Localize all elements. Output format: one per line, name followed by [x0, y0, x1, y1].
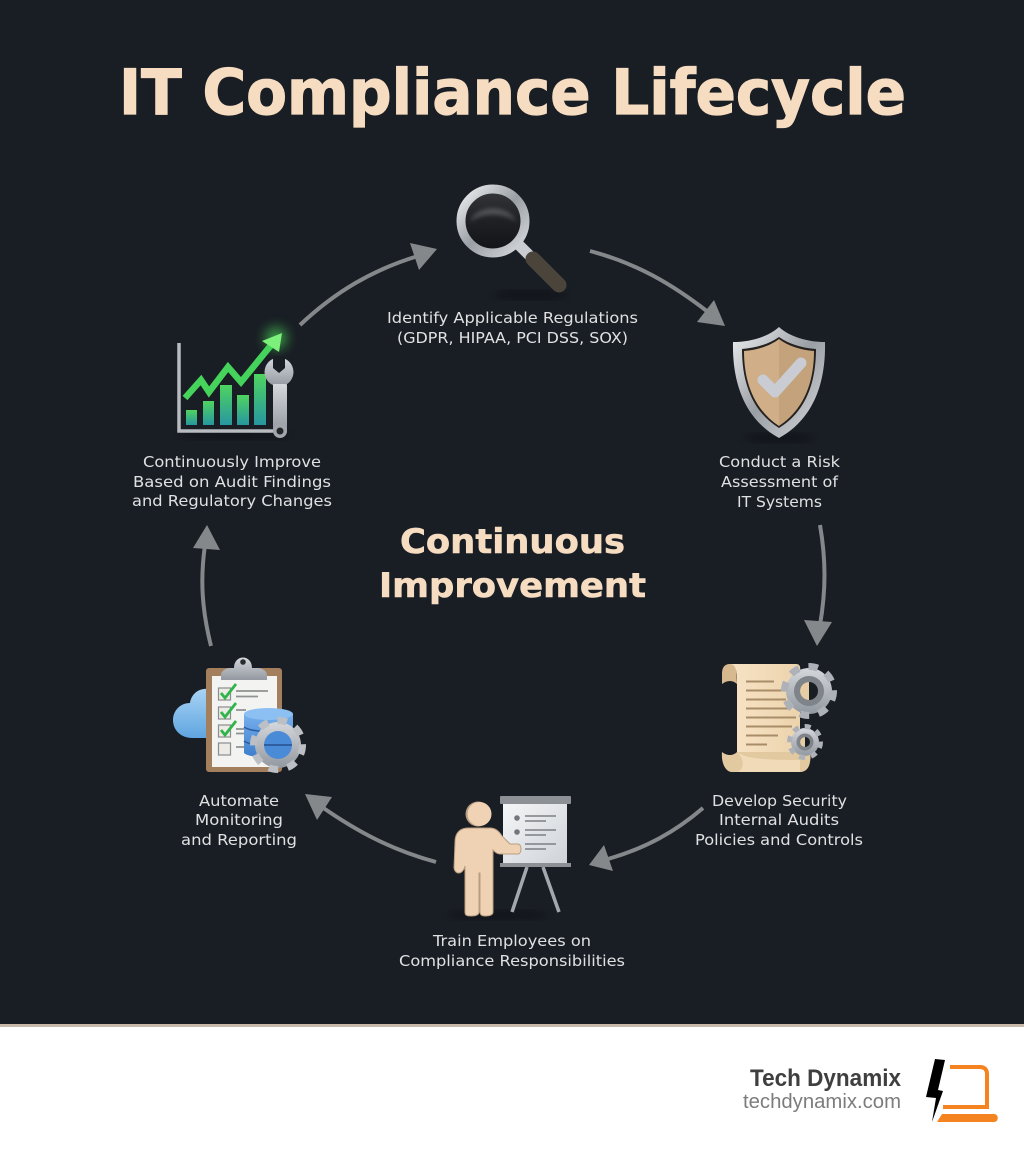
- label: risk assessment: [719, 453, 840, 511]
- arrow: risk assessment to policies: [804, 525, 832, 646]
- label: continuously improve: Based on Audit Findings: [133, 473, 331, 491]
- label: train employees: [399, 932, 625, 970]
- arrow: training to automate: [305, 794, 436, 862]
- brand name: Tech Dynamix: [750, 1065, 902, 1092]
- icon: growth chart with wrench: [179, 327, 294, 438]
- icon: presenter at whiteboard: [448, 796, 571, 918]
- label: risk assessment: IT Systems: [737, 493, 822, 511]
- label: identify regulations: (GDPR, HIPAA, PCI DSS, SOX): [397, 329, 628, 347]
- label: identify regulations: Identify Applicable Regulations: [387, 309, 638, 327]
- center heading: continuous improvement: [379, 522, 646, 606]
- label: automate monitoring: Automate: [199, 792, 279, 810]
- label: security policies: [695, 792, 863, 849]
- label: identify regulations: [387, 309, 638, 347]
- icon: policy scroll with gears: [722, 664, 834, 772]
- arrow: identify to risk assessment: [590, 251, 725, 326]
- logo: lightning bolt and laptop: [926, 1059, 998, 1122]
- label: train employees: Compliance Responsibilities: [399, 952, 625, 970]
- center heading: continuous improvement: Improvement: [379, 566, 646, 606]
- title: IT Compliance Lifecycle: [119, 56, 906, 129]
- label: risk assessment: Assessment of: [721, 473, 839, 491]
- footer band: [0, 1024, 1024, 1154]
- arrow: improve to identify: [300, 243, 437, 325]
- icon: clipboard, cloud, database and gear: [173, 658, 302, 772]
- label: automate monitoring: and Reporting: [181, 831, 297, 849]
- label: risk assessment: Conduct a Risk: [719, 453, 840, 471]
- brand url: techdynamix.com: [743, 1091, 901, 1113]
- arrow: policies to training: [589, 808, 703, 871]
- arrow: automate to improve: [193, 525, 220, 646]
- label: security policies: Internal Audits: [719, 811, 839, 829]
- center heading: continuous improvement: Continuous: [400, 522, 625, 562]
- label: continuously improve: Continuously Improve: [143, 453, 321, 471]
- icon: magnifying glass: [461, 189, 566, 298]
- label: security policies: Develop Security: [712, 792, 847, 810]
- label: automate monitoring: [181, 792, 297, 849]
- label: continuously improve: [132, 453, 332, 510]
- label: continuously improve: and Regulatory Changes: [132, 492, 332, 510]
- label: security policies: Policies and Controls: [695, 831, 863, 849]
- icon: shield with check: [733, 327, 825, 441]
- label: automate monitoring: Monitoring: [195, 811, 283, 829]
- label: train employees: Train Employees on: [432, 932, 591, 950]
